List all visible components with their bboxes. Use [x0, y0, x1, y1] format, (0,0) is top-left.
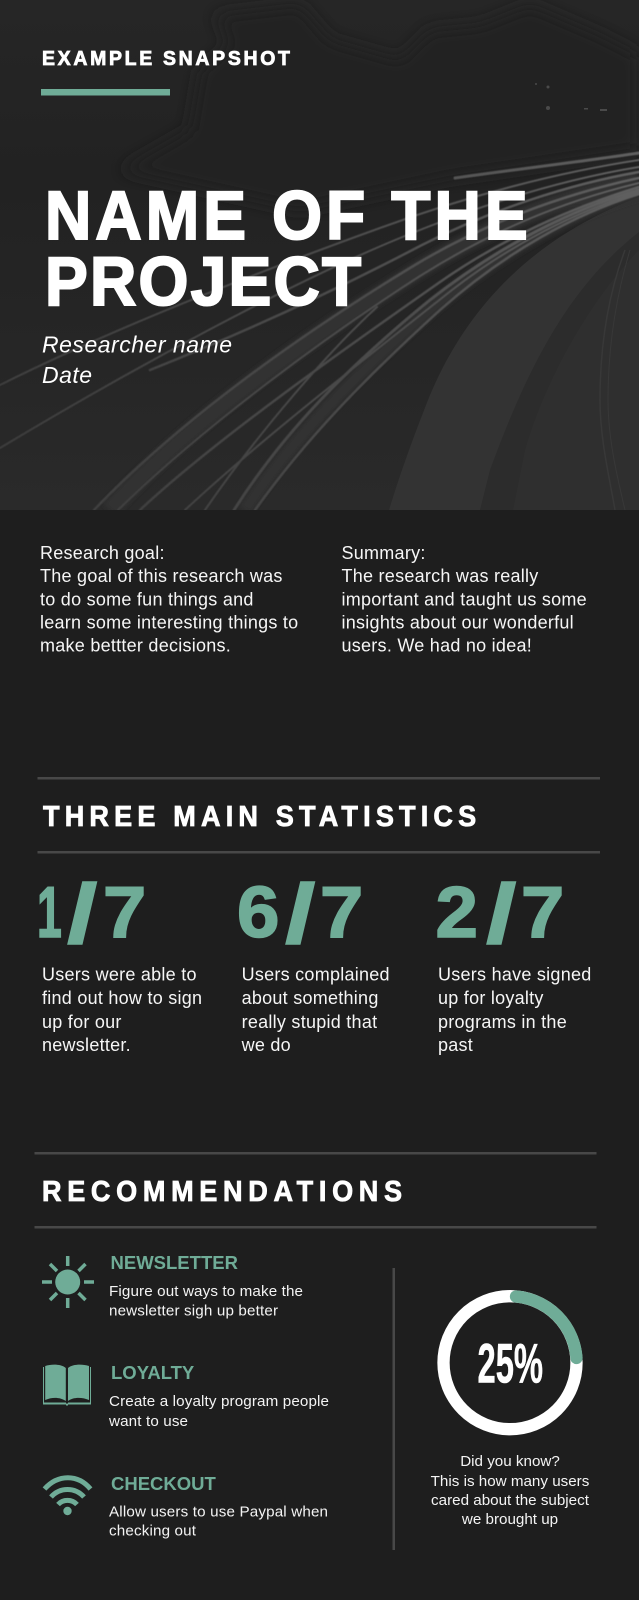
statistic 3: programs in the: [438, 1012, 567, 1032]
text block: summary: Summary:: [342, 543, 426, 563]
heading: three main statistics: THREE MAIN STATISTICS: [43, 800, 476, 832]
vertical divider: [392, 1268, 395, 1550]
number: 1/7: /: [68, 868, 96, 960]
recommendation: newsletter: Figure out ways to make the: [109, 1283, 303, 1300]
statistic 3: [436, 868, 592, 1055]
icon: wifi signal: [44, 1478, 90, 1515]
text block: research goal: learn some interesting things to: [40, 613, 298, 633]
recommendation: checkout: checking out: [109, 1523, 197, 1540]
recommendation: newsletter: [42, 1252, 303, 1320]
text block: summary: insights about our wonderful: [342, 613, 574, 633]
text block: summary: users. We had no idea!: [342, 636, 532, 656]
title: [45, 178, 528, 321]
recommendation: checkout: CHECKOUT: [111, 1473, 217, 1494]
heading: recommendations: RECOMMENDATIONS: [42, 1175, 402, 1207]
number: 6/7: /: [286, 868, 314, 960]
statistic 1: [37, 868, 202, 1055]
statistic 2: really stupid that: [242, 1012, 377, 1032]
researcher name and date: [42, 332, 232, 388]
number: 6/7: 6: [237, 872, 279, 953]
statistic 3: past: [438, 1035, 473, 1055]
number: 6/7: [237, 868, 363, 960]
statistic 2: [237, 868, 390, 1055]
statistic 1: newsletter.: [42, 1035, 131, 1055]
statistic 1: find out how to sign: [42, 988, 202, 1008]
statistic 2: we do: [241, 1035, 291, 1055]
number: 1/7: [37, 868, 146, 960]
text block: summary: [342, 543, 587, 656]
statistic 2: Users complained: [242, 965, 390, 985]
callout: did you know: [431, 1453, 590, 1528]
callout: did you know: we brought up: [461, 1511, 558, 1528]
callout: did you know: cared about the subject: [431, 1492, 590, 1509]
donut chart: 25%: 25%: [478, 1331, 543, 1395]
text block: summary: important and taught us some: [342, 589, 587, 609]
researcher name and date: Date: [42, 362, 92, 388]
researcher name and date: Researcher name: [42, 332, 232, 358]
recommendation: loyalty: Create a loyalty program people: [109, 1393, 329, 1410]
number: 6/7: 7: [320, 872, 363, 952]
text block: research goal: Research goal:: [40, 543, 165, 563]
recommendation: loyalty: want to use: [108, 1413, 188, 1430]
statistic 3: Users have signed: [438, 965, 592, 985]
number: 2/7: 2: [436, 872, 478, 953]
recommendation: loyalty: [43, 1362, 329, 1430]
number: 2/7: /: [487, 868, 515, 960]
statistic 3: up for loyalty: [438, 988, 544, 1008]
accent bar: [41, 89, 170, 96]
text block: research goal: make bettter decisions.: [40, 636, 231, 656]
statistic 1: Users were able to: [42, 965, 197, 985]
title: PROJECT: [45, 244, 361, 321]
icon: open book: [43, 1365, 91, 1406]
statistic 1: up for our: [42, 1012, 122, 1032]
text block: research goal: [40, 543, 298, 656]
number: 1/7: 7: [103, 872, 146, 952]
recommendation: newsletter: newsletter sigh up better: [109, 1303, 278, 1320]
recommendation: loyalty: LOYALTY: [111, 1362, 195, 1383]
icon: sun: [42, 1256, 94, 1308]
heading: example snapshot: EXAMPLE SNAPSHOT: [42, 48, 290, 70]
title: NAME OF THE: [45, 178, 528, 255]
number: 1/7: 1: [37, 872, 62, 953]
recommendation: checkout: [44, 1473, 328, 1540]
number: 2/7: [436, 868, 564, 960]
callout: did you know: Did you know?: [460, 1453, 560, 1470]
statistic 2: about something: [242, 988, 379, 1008]
text block: research goal: to do some fun things and: [40, 589, 254, 609]
number: 2/7: 7: [521, 872, 564, 952]
panel: hero photo of highway light trails: [0, 0, 639, 510]
recommendation: newsletter: NEWSLETTER: [110, 1252, 238, 1273]
donut chart: 25%: [444, 1296, 576, 1429]
callout: did you know: This is how many users: [431, 1473, 590, 1490]
text block: summary: The research was really: [342, 566, 539, 586]
text block: research goal: The goal of this research was: [40, 566, 283, 586]
recommendation: checkout: Allow users to use Paypal when: [109, 1504, 328, 1521]
